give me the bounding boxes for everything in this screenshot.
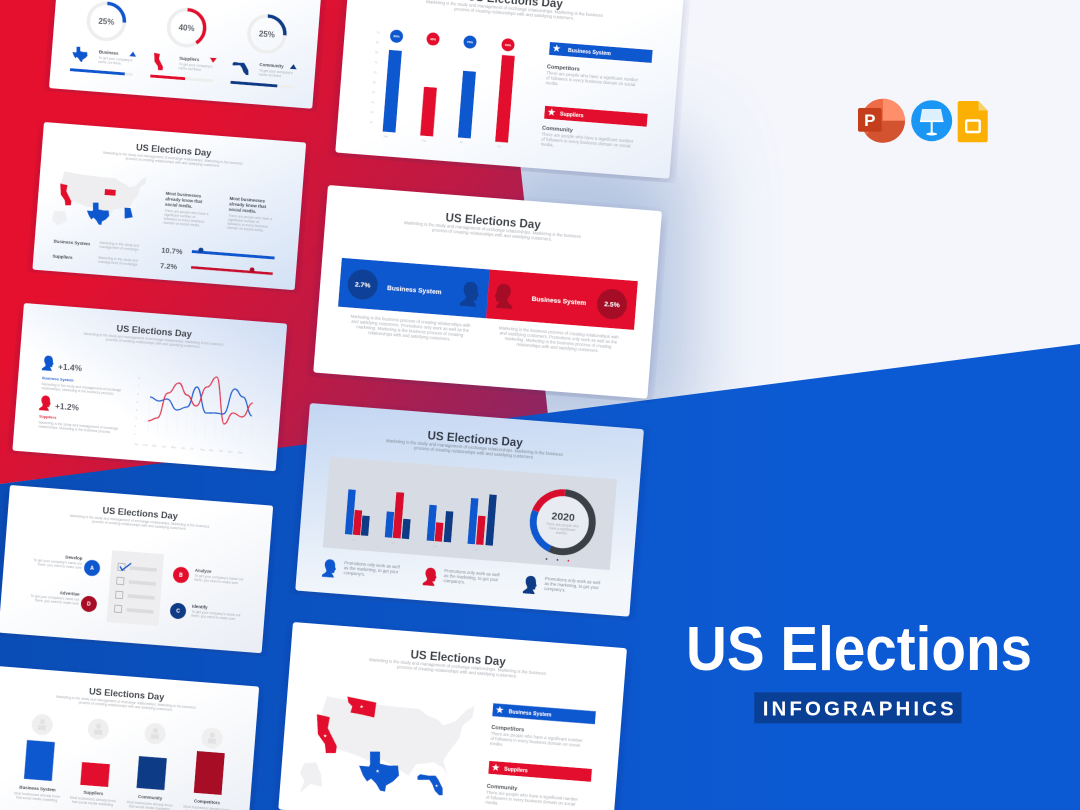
text block: left: Marketing is the business process of creating relationships with: [351, 314, 471, 328]
donut chart 2020: have a significant: [549, 526, 575, 532]
slide background: [278, 622, 627, 810]
US map: [52, 164, 150, 232]
stat: suppliers: Suppliers: [39, 415, 57, 420]
text block: community: [541, 126, 635, 154]
slide background: [0, 485, 273, 653]
bar: suppliers: Suppliers: [83, 790, 104, 796]
slide subtitle: process of creating relationships with and satisfying customers.: [414, 445, 534, 460]
stat: business system: Business System: [42, 376, 74, 383]
item A: develop: Develop: [65, 555, 83, 561]
item D: advertise: [30, 588, 98, 613]
slide: grouped bars and donut 2020: [295, 403, 644, 617]
slide background: [313, 185, 662, 399]
item D: advertise: To get your company's name out: [30, 594, 79, 602]
text block: competitors: media.: [490, 741, 503, 747]
text block: community: [485, 784, 579, 810]
chart axis labels: Mar: [152, 444, 157, 448]
slide background: [0, 666, 259, 810]
item B: analyze: Analyze: [195, 568, 212, 574]
chart panel: [323, 457, 617, 570]
subtitle tag: infographics: INFOGRAPHICS: [763, 698, 954, 720]
chart axis labels: 4: [136, 408, 138, 412]
subtitle tag: infographics: [754, 692, 962, 723]
slide: big US map with banners: [278, 622, 627, 810]
metric: suppliers: [150, 7, 220, 83]
item D: advertise: D: [87, 601, 91, 608]
main title: US Elections: [686, 615, 1032, 684]
text block: community: Community: [486, 784, 518, 792]
slide: donut percentages with states: [49, 0, 324, 109]
bar chart: 10: [370, 120, 373, 124]
legend: suppliers: management of exchange.: [98, 260, 138, 267]
legend: suppliers: [52, 252, 139, 267]
bar: suppliers: that social media marketing: [72, 800, 113, 807]
bar chart: Jul: [459, 140, 463, 144]
chart axis labels: Nov: [228, 449, 233, 454]
bar: business system: that social media marketing: [16, 795, 58, 803]
banner: business system: [549, 42, 653, 63]
stat: suppliers: [37, 395, 120, 435]
bar: competitors: Competitors: [194, 798, 221, 805]
bar chart: 80: [375, 50, 379, 55]
bar chart: Mar: [384, 134, 388, 139]
text block: community: of followers in every business domain on social: [541, 137, 631, 149]
slide subtitle: process of creating relationships with and satisfying customers.: [125, 157, 220, 168]
banner: suppliers: [488, 761, 592, 782]
text column 2: There are people who have a: [228, 214, 272, 221]
US map: [299, 683, 481, 807]
bar: community: [126, 755, 177, 810]
chart axis labels: May: [171, 445, 177, 449]
text block: left: marketing. Marketing is the business process of creating: [356, 324, 464, 338]
text block: community: media.: [485, 800, 499, 806]
metric: suppliers: name out there.: [178, 66, 202, 72]
note: navy head: company's.: [544, 586, 566, 593]
bar chart: Aug: [421, 138, 427, 143]
metric: business: Business: [99, 49, 119, 56]
text column 2: followers in every business: [227, 222, 268, 229]
legend: suppliers: Marketing is the study and: [98, 256, 138, 263]
slide subtitle: Marketing is the study and management of exchange relationships. Marketing is the business: [56, 695, 196, 710]
chart axis labels: Apr: [162, 444, 167, 449]
note: red head: company's.: [443, 578, 465, 585]
metric: business: To get your company's: [98, 56, 133, 63]
bar chart: [368, 28, 516, 149]
bar: suppliers: [69, 761, 119, 807]
slide: four block bars: [0, 666, 259, 810]
item A: develop: A: [90, 566, 94, 572]
banner: suppliers: Suppliers: [504, 767, 528, 775]
text column 1: social media.: [165, 202, 193, 209]
bar chart: 70%: [467, 40, 473, 45]
slide title: US Elections Day: [89, 686, 166, 702]
item A: develop: there, you need to make sure: [38, 562, 82, 570]
text block: right: [498, 325, 620, 355]
text column 1: domain on social media.: [163, 221, 200, 228]
background: soft shadow of slides on light area: [470, 140, 690, 440]
banner: suppliers: Suppliers: [560, 111, 584, 119]
band: red side: Business System: [531, 296, 587, 307]
chart axis labels: Sep: [209, 448, 214, 452]
bar: competitors: [183, 750, 234, 810]
slide: US map with key stats: [32, 122, 306, 290]
slide title: US Elections Day: [410, 648, 507, 669]
text column 2: significant number of: [228, 218, 259, 224]
legend: business system: Marketing is the study and: [100, 241, 139, 248]
slide background: [12, 303, 287, 471]
chart axis labels: 1: [134, 432, 136, 436]
chart axis labels: 3: [135, 416, 137, 420]
legend: business system: [53, 237, 140, 252]
bar chart: 80%: [393, 34, 400, 39]
bar chart: 70: [374, 60, 378, 64]
text block: right: relationships with and satisfying customers.: [516, 342, 599, 353]
text column 1: Most businesses: [166, 191, 202, 199]
stat: suppliers: +1.2%: [55, 401, 80, 413]
slide subtitle: process of creating relationships with and satisfying customers.: [92, 520, 187, 531]
text block: competitors: There are people who have a significant number: [491, 731, 583, 743]
banner: business system: [492, 703, 596, 724]
grouped bar chart: May: [433, 544, 439, 549]
metric: community: name out there.: [259, 72, 283, 78]
chart axis labels: Jan: [134, 442, 139, 446]
text block: community: There are people who have a significant number: [541, 132, 634, 144]
note: red head: as the marketing, to get your: [444, 573, 499, 582]
text column 2: Most businesses: [229, 196, 266, 204]
note: navy head: [523, 574, 600, 599]
slide background: [49, 0, 324, 109]
bar: suppliers: Most businesses already know: [70, 796, 117, 803]
metric: community: Community: [259, 62, 284, 69]
band: blue side: [338, 258, 490, 318]
slide title: US Elections Day: [116, 323, 193, 339]
text column 1: already know that: [165, 196, 203, 204]
background: blue wedge: [0, 344, 1080, 810]
chart axis labels: Dec: [238, 450, 243, 455]
text block: competitors: [545, 64, 639, 92]
bar chart: Jun: [497, 144, 502, 148]
chart axis labels: Jun: [181, 446, 186, 450]
note: navy head: Promotions only work as well: [545, 576, 600, 585]
bar: business system: Most businesses already know: [14, 791, 61, 799]
grouped bar chart: [344, 483, 497, 553]
stat bar: 7.2%: [160, 260, 273, 279]
grouped bar chart: Apr: [391, 541, 396, 545]
metric: business: name out there.: [98, 60, 122, 66]
item A: develop: [32, 552, 101, 577]
text block: competitors: [490, 725, 584, 753]
banner: suppliers: [544, 106, 648, 127]
slide background: [335, 0, 684, 179]
item C: identify: there, you need to make sure: [191, 614, 236, 621]
slide background: [32, 122, 306, 290]
slide subtitle: process of creating relationships with and satisfying customers.: [78, 701, 173, 712]
note: navy head: as the marketing, to get your: [544, 581, 600, 590]
metric: community: 25%: [259, 29, 275, 40]
text block: competitors: Competitors: [491, 725, 524, 733]
stat: business system: relationships. Marketing is the business process.: [41, 386, 114, 396]
text column 2: domain on social media.: [227, 226, 264, 233]
slide subtitle: process of creating relationships with and satisfying customers.: [106, 338, 201, 349]
icon: Google Slides: [958, 101, 988, 142]
bar chart: 90%: [505, 43, 511, 47]
chart axis labels: 2: [135, 424, 137, 428]
text block: competitors: of followers in every business domain on social: [490, 736, 580, 748]
text block: right: marketing. Marketing is the business process of creating: [504, 336, 612, 349]
item D: advertise: Advertise: [59, 590, 80, 597]
item B: analyze: there, you need to make sure: [194, 578, 238, 585]
chart axis labels: 8: [138, 376, 141, 380]
slide subtitle: Marketing is the study and management of exchange relationships. Marketing is the business: [70, 514, 210, 529]
chart axis labels: Feb: [143, 443, 148, 447]
bar: community: Most businesses already know: [126, 800, 173, 808]
banner: business system: Business System: [508, 709, 552, 719]
metric: business: [70, 1, 140, 76]
slide subtitle: Marketing is the study and management of exchange relationships. Marketing is the business: [404, 220, 581, 239]
legend: business system: management of exchange.: [99, 245, 140, 252]
text block: left: [349, 314, 471, 343]
slide subtitle: process of creating relationships with and satisfying customers.: [432, 227, 552, 242]
stat: suppliers: Marketing is the study and management of exchange: [39, 421, 118, 431]
chart axis labels: Oct: [219, 449, 223, 453]
item C: identify: C: [176, 608, 180, 615]
text block: competitors: of followers in every business domain on social: [546, 75, 636, 87]
item B: analyze: To get your company's name out: [194, 574, 243, 582]
slide: checklist: [0, 485, 273, 653]
text column 2: [227, 196, 274, 233]
stat bar: 7.2%: 7.2%: [160, 261, 178, 271]
background: red wedge: [0, 0, 548, 484]
chart axis labels: 7: [138, 384, 140, 388]
text block: community: media.: [541, 142, 554, 148]
text block: right: and satisfying customers. Promotions only work as well as the: [499, 330, 618, 345]
stat: business system: Marketing is the study and management of exchange: [42, 382, 121, 392]
donut chart 2020: There are people who: [546, 522, 579, 528]
bar chart: 30: [371, 100, 375, 104]
icon: PowerPoint: P: [864, 111, 875, 130]
chart axis labels: 6: [137, 392, 139, 396]
text column 1: significant number of: [164, 213, 196, 219]
item C: identify: [169, 602, 241, 624]
text block: community: Community: [542, 126, 574, 134]
note: blue head: [322, 559, 400, 583]
slide subtitle: Marketing is the study and management of exchange relationships. Marketing is the business: [84, 332, 224, 347]
text block: community: There are people who have a significant number: [486, 790, 579, 802]
band: blue side: Business System: [387, 285, 442, 296]
text block: left: relationships with and satisfying customers.: [368, 330, 451, 342]
bar: business system: Business System: [19, 785, 56, 792]
text column 2: social media.: [229, 207, 256, 214]
donut chart 2020: 2020: [551, 510, 575, 524]
note: blue head: as the marketing, to get your: [344, 565, 399, 574]
text block: competitors: media.: [545, 80, 559, 86]
chart axis labels: Jul: [190, 446, 194, 451]
slide subtitle: process of creating relationships with and satisfying customers.: [397, 664, 517, 679]
slide: vertical bars with banners: [335, 0, 684, 179]
item B: analyze: [172, 566, 244, 588]
bar chart: 20: [370, 110, 374, 114]
note: red head: [423, 566, 500, 591]
icon: Keynote: [911, 100, 952, 141]
legend: suppliers: Suppliers: [52, 254, 73, 260]
bar chart: 60: [374, 70, 377, 74]
bar: community: Community: [138, 794, 163, 801]
text column 2: already know that: [229, 201, 267, 209]
metric: business: 25%: [98, 17, 115, 27]
slide title: US Elections Day: [136, 142, 213, 158]
band: red side: 2.5%: [604, 301, 620, 309]
stat bar: 10.7%: 10.7%: [161, 246, 183, 256]
note: blue head: company's.: [343, 570, 365, 577]
metric: community: [230, 13, 301, 89]
donut chart 2020: [531, 490, 594, 554]
icon: PowerPoint: [858, 99, 905, 143]
text block: community: of followers in every business domain on social: [486, 795, 575, 807]
grouped bar chart: Mar: [351, 538, 356, 542]
legend: business system: Business System: [53, 239, 90, 246]
slide subtitle: Marketing is the study and management of exchange relationships. Marketing is the business: [103, 151, 243, 166]
bar chart: 10: [377, 30, 380, 35]
bar chart: 90: [376, 40, 380, 45]
metric: suppliers: 40%: [178, 23, 195, 33]
bar chart: 40: [372, 90, 376, 94]
stat: suppliers: relationships. Marketing is the business process.: [38, 425, 111, 434]
item A: develop: To get your company's name out: [33, 558, 82, 566]
chart axis labels: 5: [136, 400, 139, 404]
item B: analyze: B: [179, 573, 183, 579]
bar chart: 40%: [430, 37, 437, 41]
note: blue head: Promotions only work as well: [344, 560, 400, 570]
note: red head: Promotions only work as well: [444, 568, 500, 577]
banner: business system: Business System: [568, 48, 611, 57]
metric: community: To get your company's: [259, 68, 293, 75]
text column 1: [163, 191, 210, 228]
stat bar: 10.7%: [161, 245, 275, 263]
bar chart: 50: [373, 80, 376, 84]
text block: left: and satisfying customers. Promotions only work as well as the: [351, 319, 470, 333]
slide title: US Elections Day: [102, 505, 179, 521]
band: blue side: 2.7%: [355, 281, 371, 290]
bar: business system: [14, 739, 65, 803]
slide: two-sided band: [313, 185, 662, 399]
metric: suppliers: Suppliers: [179, 56, 200, 62]
icons row: [31, 713, 223, 749]
band: red side: [486, 269, 638, 330]
slide subtitle: process of creating relationships with and satisfying customers.: [454, 6, 574, 21]
slide: line chart: [12, 303, 287, 471]
donut chart 2020: number.: [556, 531, 568, 536]
chart axis labels: Aug: [200, 447, 205, 452]
slide subtitle: Marketing is the study and management of exchange relationships. Marketing is the business: [386, 438, 563, 457]
item C: identify: To get your company's name out: [191, 610, 241, 617]
stat: business system: +1.4%: [58, 361, 83, 373]
slide background: [295, 403, 644, 617]
chart axis labels: [133, 376, 249, 455]
item C: identify: Identify: [192, 604, 208, 610]
slide title: US Elections Day: [445, 211, 542, 232]
metric: suppliers: To get your company's: [179, 62, 213, 69]
line chart: [148, 377, 253, 442]
donut legend: [546, 558, 569, 562]
text column 1: followers in every business: [164, 217, 205, 224]
item D: advertise: there, you need to make sure: [35, 598, 79, 606]
text block: competitors: There are people who have a significant number: [546, 70, 639, 82]
grouped bar chart: Jun: [474, 547, 479, 552]
slide title: US Elections Day: [427, 429, 524, 450]
stat: business system: [40, 355, 124, 396]
text column 1: There are people who have a: [164, 209, 209, 216]
checklist panel: [107, 550, 164, 626]
text block: competitors: Competitors: [547, 64, 580, 73]
slide subtitle: Marketing is the study and management of exchange relationships. Marketing is the business: [369, 657, 546, 676]
text block: right: Marketing is the business process of creating relationships with: [499, 325, 620, 340]
